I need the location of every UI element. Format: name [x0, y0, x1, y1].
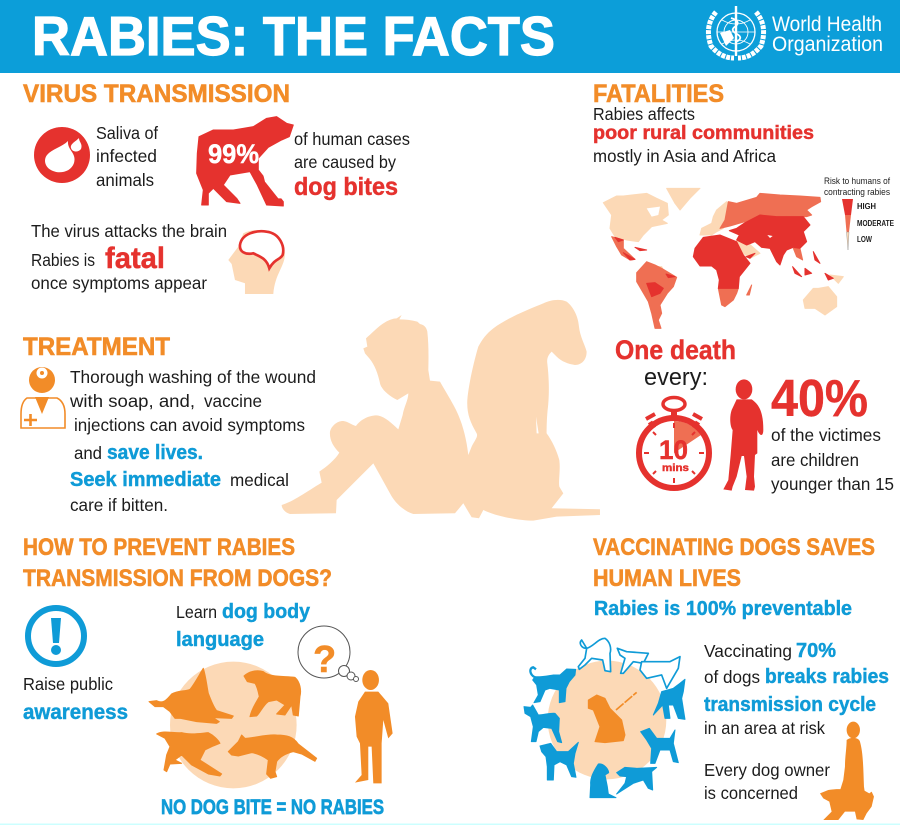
- text: saliva: [96, 123, 158, 190]
- text: raise awareness: awareness: [23, 701, 128, 724]
- text: treatment advice: save lives.: [107, 442, 203, 464]
- text: treatment advice: care if bitten.: [70, 495, 168, 515]
- text: communities: Rabies affects: [593, 104, 695, 124]
- icon: WHO logo: [708, 6, 764, 58]
- heading: FATALITIES: [593, 80, 724, 108]
- map legend: Risk to humans of: [824, 176, 890, 187]
- text: saliva: infected: [96, 146, 157, 166]
- map legend: [824, 176, 894, 250]
- panel: deaths and victims: [615, 335, 894, 494]
- icon: owner walking dog: [820, 722, 874, 820]
- text: vaccinating: Vaccinating: [704, 641, 792, 661]
- stat: 40% children: of the victimes: [771, 425, 881, 445]
- map legend: contracting rabies: [824, 187, 890, 198]
- stat: 40% children: 40%: [771, 370, 868, 428]
- text: vaccinating: Every dog owner: [704, 760, 830, 780]
- text: one death every: [615, 335, 736, 391]
- text: saliva: animals: [96, 170, 154, 190]
- panel: prevention: [23, 534, 393, 819]
- icon: stopwatch 10 mins: 10: [659, 435, 688, 465]
- text: vaccinating: transmission cycle: [704, 694, 876, 716]
- title: RABIES: THE FACTS: [32, 5, 555, 67]
- text: vaccinating: breaks rabies: [765, 666, 889, 688]
- heading: HOW TO PREVENT RABIES: [23, 534, 295, 561]
- icon: head with brain: [228, 230, 285, 294]
- icon: red dog with 99%: 99%: [208, 139, 259, 169]
- icon: stopwatch 10 mins: [639, 398, 709, 488]
- stat: 40% children: are children: [771, 450, 859, 470]
- heading: TRANSMISSION FROM DOGS?: [23, 565, 332, 592]
- text: dog body language: [176, 601, 311, 651]
- text: raise awareness: [23, 674, 128, 724]
- text: communities: poor rural communities: [593, 122, 814, 144]
- heading: [593, 534, 875, 592]
- centre silhouette: boy and dog back to back: [282, 300, 600, 521]
- text: brain: Rabies is: [31, 250, 95, 270]
- panel: treatment: [21, 333, 316, 515]
- heading: VIRUS TRANSMISSION: [23, 80, 290, 108]
- text: raise awareness: Raise public: [23, 674, 113, 694]
- stat: 40% children: younger than 15: [771, 474, 894, 494]
- text: brain: The virus attacks the brain: [31, 221, 227, 241]
- text: treatment advice: vaccine: [204, 391, 262, 411]
- WHO name: Organization: [772, 33, 883, 56]
- thought bubble with question mark: [298, 626, 358, 682]
- heading: [23, 534, 332, 592]
- icon: saliva drops: [34, 127, 90, 183]
- text: communities: mostly in Asia and Africa: [593, 146, 776, 166]
- text: vaccinating: [704, 640, 889, 803]
- text: one death every: every:: [644, 364, 708, 391]
- text: treatment advice: medical: [230, 470, 289, 490]
- text: dog bites: [294, 129, 410, 201]
- text: treatment advice: [69, 367, 316, 515]
- text: dog bites: dog bites: [294, 173, 398, 201]
- text: vaccinating: of dogs: [704, 667, 760, 687]
- text: treatment advice: Thorough washing of the wound: [70, 367, 316, 387]
- text: brain: once symptoms appear: [31, 273, 207, 293]
- circle of vaccinated dogs: [524, 638, 685, 798]
- map legend: HIGH: [857, 201, 876, 211]
- text: treatment advice: with soap, and,: [69, 391, 195, 411]
- text: vaccinating: in an area at risk: [704, 718, 825, 738]
- map legend: LOW: [857, 234, 873, 244]
- text: dog body language: dog body: [222, 601, 311, 623]
- text: dog bites: of human cases: [294, 129, 410, 149]
- text: brain: [31, 221, 227, 293]
- text: vaccinating: 70%: [796, 640, 836, 662]
- icon: child: [355, 670, 393, 783]
- WHO name: [772, 13, 883, 56]
- icon: doctor: [21, 367, 65, 428]
- text: vaccinating: is concerned: [704, 783, 798, 803]
- text: communities: [593, 104, 814, 166]
- stat: 40% children: [771, 370, 894, 494]
- heading: TREATMENT: [23, 333, 170, 361]
- panel: vaccinating dogs: [524, 534, 889, 820]
- icon: stopwatch 10 mins: mins: [662, 462, 689, 474]
- text: treatment advice: injections can avoid symptoms: [74, 415, 305, 435]
- slogan: NO DOG BITE = NO RABIES: [161, 796, 384, 819]
- WHO name: World Health: [772, 13, 882, 36]
- world risk map: [603, 188, 843, 328]
- subheading: Rabies is 100% preventable: [594, 598, 852, 620]
- text: dog body language: Learn: [176, 602, 217, 622]
- text: dog bites: are caused by: [294, 152, 396, 172]
- thought bubble with question mark: ?: [313, 639, 336, 681]
- heading: HUMAN LIVES: [593, 565, 741, 592]
- header band: [0, 0, 900, 73]
- icon: red dog with 99%: [197, 117, 293, 206]
- circle with four dogs: [149, 662, 317, 788]
- text: treatment advice: Seek immediate: [70, 469, 221, 491]
- text: dog body language: language: [176, 629, 264, 651]
- icon: exclamation: [28, 608, 84, 664]
- text: one death every: One death: [615, 335, 736, 365]
- text: treatment advice: and: [74, 443, 102, 463]
- text: saliva: Saliva of: [96, 123, 158, 143]
- icon: child silhouette: [723, 379, 763, 491]
- panel: fatalities: [593, 80, 894, 328]
- text: brain: fatal: [105, 242, 165, 275]
- panel: virus transmission: [23, 80, 410, 294]
